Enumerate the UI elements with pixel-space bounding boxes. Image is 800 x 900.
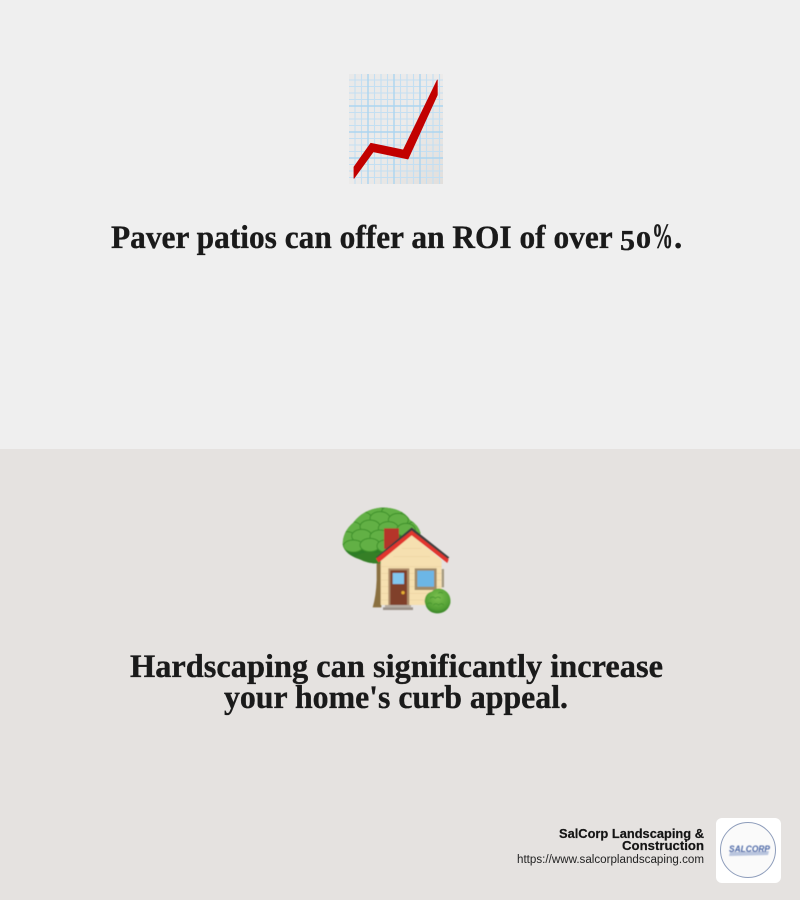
logo badge bbox=[716, 818, 781, 883]
roof bbox=[376, 531, 449, 563]
panel: top background bbox=[0, 0, 800, 449]
heading: curb appeal statement: Hardscaping can significantly increase bbox=[130, 649, 663, 685]
logo badge: SALCORP bbox=[729, 844, 771, 854]
panel: bottom background bbox=[0, 449, 800, 900]
heading: ROI statement: . bbox=[674, 220, 682, 256]
heading: ROI statement: 5 bbox=[620, 226, 635, 257]
window bbox=[415, 568, 437, 590]
tree trunk bbox=[373, 560, 382, 607]
bush bbox=[425, 589, 450, 613]
heading: ROI statement: % bbox=[652, 216, 673, 256]
house wall bbox=[381, 535, 442, 605]
footer: company name and url bbox=[517, 826, 704, 866]
heading: curb appeal statement bbox=[130, 649, 663, 716]
chimney bbox=[384, 528, 399, 549]
tree canopy bbox=[342, 506, 422, 564]
steps bbox=[385, 605, 411, 607]
footer: company name and url: Construction bbox=[622, 838, 704, 853]
door bbox=[388, 568, 409, 605]
heading: ROI statement: 0 bbox=[636, 228, 651, 254]
icon: chart with upward trend bbox=[349, 74, 443, 184]
footer: company name and url: https://www.salcorplandscaping.com bbox=[517, 854, 704, 866]
heading: ROI statement: Paver patios can offer an ROI of over bbox=[111, 220, 620, 256]
icon: house with tree bbox=[337, 505, 450, 613]
heading: curb appeal statement: your home's curb appeal. bbox=[224, 680, 568, 716]
footer: company name and url: SalCorp Landscaping & bbox=[559, 826, 704, 841]
roof shingles bbox=[376, 527, 449, 559]
